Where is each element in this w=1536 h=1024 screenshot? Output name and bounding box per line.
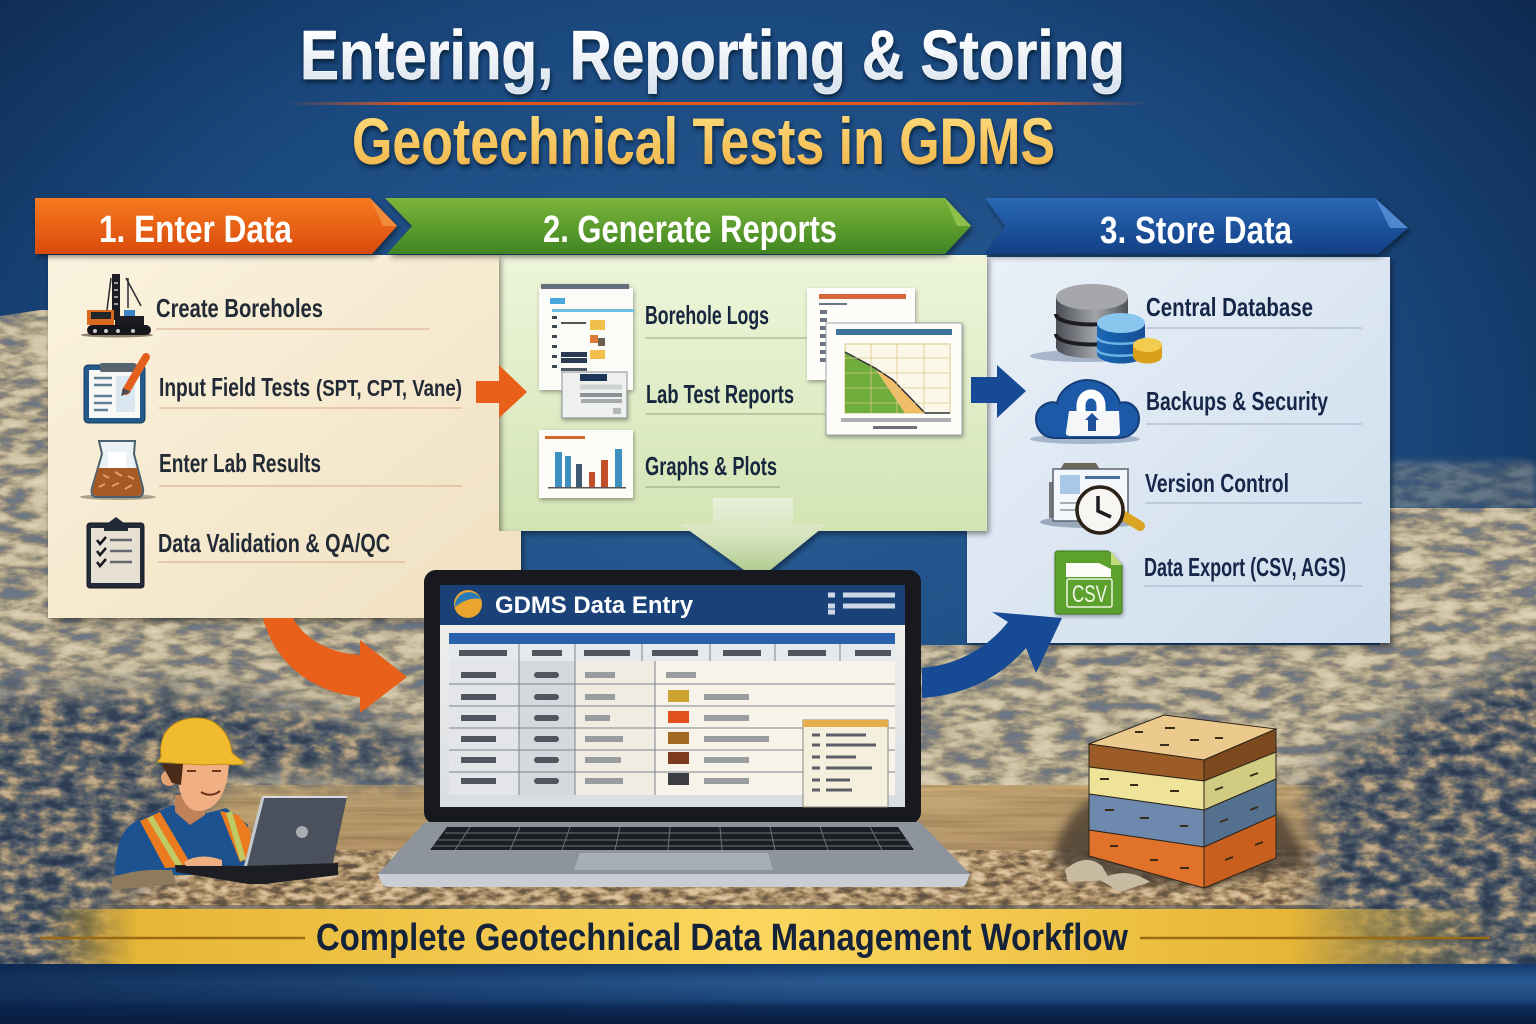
icon: field test clipboard xyxy=(84,357,146,423)
icon: csv file: CSV xyxy=(1072,581,1107,608)
panel: enter data xyxy=(48,255,521,618)
arrow: reports down to laptop xyxy=(680,498,827,580)
header arrow: 3. Store Data xyxy=(985,198,1408,254)
small laptop xyxy=(175,797,347,884)
header arrow: 2. Generate Reports: 2. Generate Reports xyxy=(543,209,837,251)
icon: lab beaker xyxy=(80,441,156,500)
panel: store data xyxy=(967,257,1390,643)
arrow: reports to store data xyxy=(971,365,1026,418)
arrow: laptop to store data curved blue xyxy=(922,612,1062,698)
icon: borehole log document xyxy=(539,284,634,418)
title xyxy=(285,16,1150,178)
rubble mound xyxy=(112,870,176,890)
list: report items: Graphs & Plots xyxy=(645,451,777,481)
list: store data items xyxy=(1144,292,1362,586)
title line 1: Entering, Reporting & Storing xyxy=(300,16,1125,94)
icon: checklist clipboard xyxy=(87,517,144,588)
list: store data items: Version Control xyxy=(1145,468,1289,498)
soil mound xyxy=(1052,800,1310,888)
header arrow: 1. Enter Data xyxy=(35,198,397,254)
icon: clock document xyxy=(1040,463,1140,533)
icon: csv file xyxy=(1055,551,1122,614)
panel: generate reports xyxy=(499,255,987,580)
list: store data items: Data Export (CSV, AGS) xyxy=(1144,552,1346,582)
icon: cloud lock xyxy=(1030,380,1140,444)
laptop base xyxy=(378,822,970,887)
footer ribbon: Complete Geotechnical Data Management Workflow xyxy=(316,917,1128,959)
list: store data items: Backups & Security xyxy=(1146,386,1328,416)
header arrow: 1. Enter Data: 1. Enter Data xyxy=(99,209,293,251)
icon: lab test report chart xyxy=(807,288,962,435)
app header bar xyxy=(440,585,905,625)
icon: bar chart document xyxy=(539,430,633,498)
header arrow: 2. Generate Reports xyxy=(385,198,971,254)
list: enter data items: Create Boreholes xyxy=(156,293,323,323)
list: enter data items xyxy=(156,293,462,562)
worker with laptop xyxy=(112,718,347,890)
floating report sheet xyxy=(803,720,888,807)
laptop screen xyxy=(440,585,905,807)
list: enter data items: (SPT, CPT, Vane) xyxy=(316,375,462,401)
icon: database xyxy=(1030,284,1162,364)
app header bar: GDMS Data Entry xyxy=(495,592,694,619)
list: report items xyxy=(645,300,825,487)
header arrow: 3. Store Data: 3. Store Data xyxy=(1100,210,1293,252)
laptop bezel xyxy=(424,570,921,824)
icon: drill rig xyxy=(81,274,153,338)
worker head xyxy=(161,762,229,825)
list: enter data items: Input Field Tests xyxy=(159,372,310,402)
hard hat xyxy=(157,718,245,765)
list: store data items: Central Database xyxy=(1146,292,1313,322)
arrow: enter data to reports xyxy=(476,365,527,418)
safety vest xyxy=(140,811,250,868)
soil sample layers block xyxy=(1052,715,1310,892)
list: enter data items: Enter Lab Results xyxy=(159,448,321,478)
footer ribbon xyxy=(0,909,1536,964)
list: report items: Borehole Logs xyxy=(645,300,769,330)
title underline xyxy=(285,102,1150,105)
cube layers xyxy=(1089,715,1276,888)
title line 2: Geotechnical Tests in GDMS xyxy=(352,104,1055,178)
hand xyxy=(184,856,222,866)
worker body xyxy=(115,805,252,875)
loose rocks xyxy=(1065,860,1150,892)
data table xyxy=(449,633,895,795)
list: report items: Lab Test Reports xyxy=(646,379,794,409)
list: enter data items: Data Validation & QA/QC xyxy=(158,528,390,558)
laptop xyxy=(378,570,970,887)
arrow: panel to laptop curved orange xyxy=(263,618,407,713)
